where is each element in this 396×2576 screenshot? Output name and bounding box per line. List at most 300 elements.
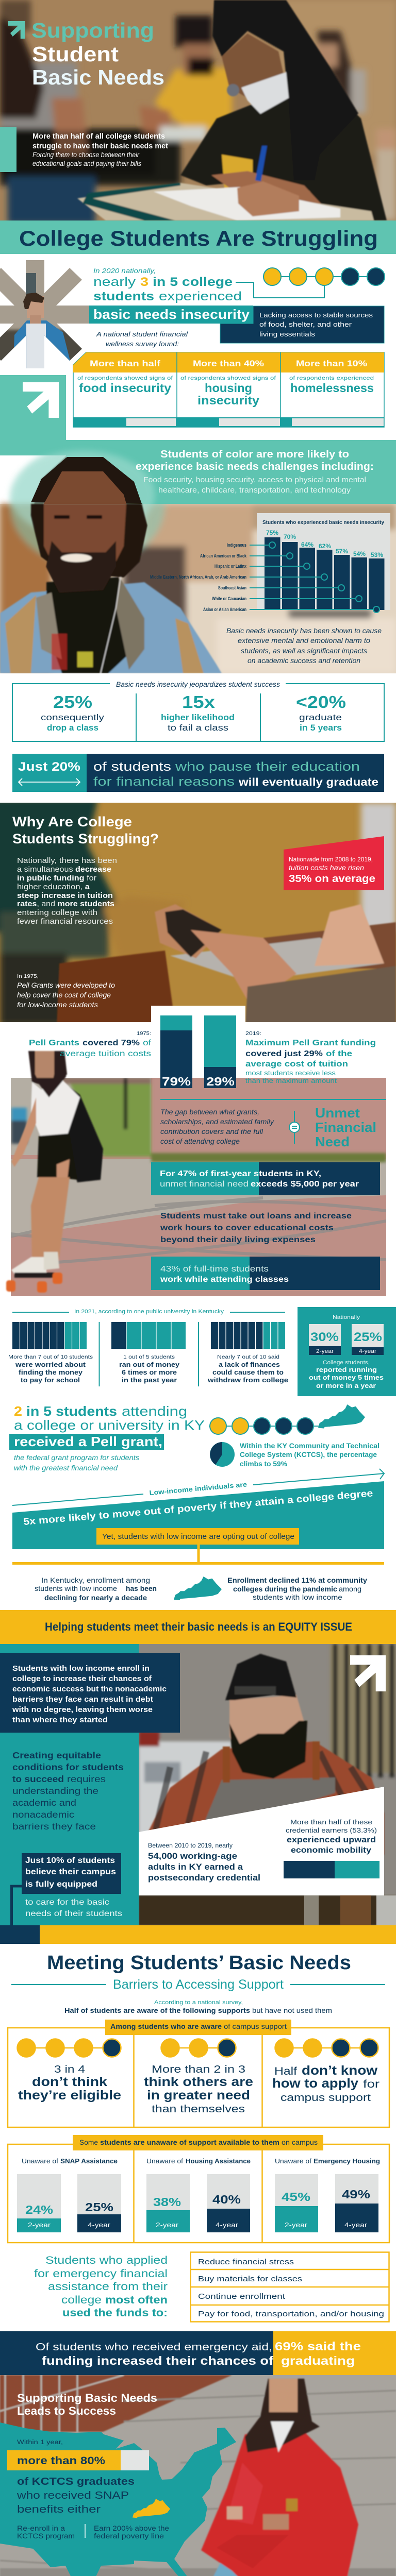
- bar chart: basic needs insecurity by race: 75%: [266, 529, 278, 536]
- panel: aware of campus support: Half: [274, 2065, 297, 2077]
- label: basic needs insecurity: basic needs insecurity: [93, 307, 250, 322]
- list: uses of funds: [190, 2252, 389, 2321]
- bar chart: basic needs insecurity by race: 64%: [301, 541, 314, 548]
- text: emergency financial assistance: [34, 2255, 168, 2319]
- headline: 2 in 5 students: 2: [14, 1403, 22, 1419]
- callout: low income debt: Students with low income enroll in: [12, 1665, 150, 1673]
- text: national funding paragraph: [17, 857, 117, 926]
- light teal frame with arrow: [0, 375, 66, 442]
- panel: university stats: More than 7 out of 10 students: [8, 1354, 93, 1360]
- text: creating equitable conditions: barriers they face: [12, 1821, 96, 1832]
- survey table: insecurity: [197, 394, 259, 407]
- panel: aware of campus support: than themselves: [152, 2104, 245, 2115]
- survey table: [73, 352, 384, 427]
- text: creating equitable conditions: academic and: [12, 1798, 76, 1808]
- callout: just 20%: Just 20%: [18, 760, 80, 774]
- heading: Meeting Students' Basic Needs: Meeting Students’ Basic Needs: [47, 1952, 351, 1974]
- callout: just 10%: Just 10% of students: [25, 1856, 115, 1865]
- headline: 2 in 5 students: a college or university in KY: [14, 1417, 205, 1433]
- text: enrollment decline: has been: [126, 1584, 157, 1592]
- text: Pell Grants 1975: [17, 973, 116, 1009]
- text: enrollment decline: declining for nearly a decade: [44, 1594, 147, 1602]
- teal band: students of color: Students of color are more likely to: [160, 449, 349, 460]
- panel: jeopardizes student success: <20%: [296, 692, 346, 711]
- bar chart: basic needs insecurity by race: 57%: [336, 548, 348, 555]
- panel: nationally: 4-year: [359, 1348, 376, 1354]
- panel: aware of campus support: More than 2 in 3: [152, 2064, 245, 2075]
- text: national survey: According to a national survey,: [154, 1999, 243, 2006]
- text: unmet need definition: The gap between what grants,: [160, 1108, 259, 1116]
- text: emergency financial assistance: used the funds to:: [62, 2307, 168, 2319]
- text: creating equitable conditions: nonacademic: [12, 1809, 74, 1820]
- text: mental and emotional harm: [226, 627, 382, 665]
- text: national funding paragraph: entering college with: [17, 909, 97, 917]
- white panel behind Pell bars: [0, 1006, 396, 1155]
- stat bar: 47% first-year: exceeds $5,000 per year: [251, 1180, 359, 1189]
- panel: KCTCS 80%: [7, 2439, 169, 2540]
- hero photo: student writing in class: [0, 0, 396, 224]
- panel: unaware of support: 49%: [342, 2188, 370, 2201]
- heading: unmet financial need: Financial: [315, 1120, 376, 1135]
- bar chart: basic needs insecurity by race: 62%: [319, 543, 331, 550]
- text: survey intro: wellness survey found:: [106, 340, 179, 348]
- panel: aware of campus support: how to apply: [272, 2076, 358, 2091]
- panel: upward mobility: More than half of these: [290, 1818, 372, 1826]
- teal accent block: [0, 127, 16, 172]
- text: KCTCS percentage: College System (KCTCS), the percentage: [240, 1451, 377, 1459]
- photo continuation: face: [31, 504, 147, 592]
- text: Pell Grants 1975: Pell Grants were developed to: [17, 981, 116, 989]
- icon: 3 of 5 circles with connector: [236, 268, 385, 298]
- panel: 5x more likely: [12, 1481, 384, 1549]
- text: 1975 Pell coverage: covered 79%: [82, 1039, 140, 1047]
- panel: unaware of support: Unaware of: [275, 2158, 312, 2165]
- bar chart: basic needs insecurity by race: Middle Eastern, North African, Arab, or Arab American: [150, 574, 246, 580]
- bar chart: basic needs insecurity by race: 70%: [284, 533, 296, 540]
- icon: 2 of 5 circles: [209, 1418, 330, 1434]
- text: emergency financial assistance: for emergency financial: [34, 2268, 168, 2280]
- headline: 3 in 5 college students: students: [93, 290, 154, 303]
- text: unmet need definition: [160, 1108, 274, 1145]
- heading: unmet financial need: Unmet: [315, 1105, 360, 1121]
- heading: unmet financial need: Need: [315, 1134, 350, 1149]
- hero subtitle: educational goals and paying their bills: [32, 160, 141, 167]
- title: Student: [32, 42, 119, 66]
- callout: just 10%: is fully equipped: [25, 1880, 97, 1889]
- panel: unaware of support: Emergency Housing: [314, 2158, 380, 2165]
- text: KCTCS percentage: [240, 1442, 380, 1468]
- panel: unaware of support: 40%: [212, 2193, 241, 2206]
- panel: unaware of support: Housing Assistance: [186, 2158, 251, 2165]
- bar chart: basic needs insecurity by race: Asian or Asian American: [203, 607, 246, 612]
- panel: jeopardizes student success: drop a class: [47, 723, 98, 733]
- panel: KCTCS 80%: of KCTCS graduates: [17, 2476, 135, 2487]
- panel: jeopardizes student success: 25%: [53, 692, 92, 711]
- text: loans and work hours: beyond their daily living expenses: [160, 1235, 316, 1244]
- panel: university stats: withdraw from college: [207, 1377, 288, 1384]
- panel: unaware of support: Unaware of: [146, 2158, 184, 2165]
- panel: unaware of support: Some: [79, 2139, 98, 2146]
- subheading: barriers: Barriers to Accessing Support: [113, 1977, 284, 1992]
- survey table: homelessness: [290, 381, 374, 395]
- heading: supporting basic needs leads to success: [17, 2392, 157, 2417]
- panel: nationally: 2-year: [316, 1348, 334, 1354]
- callout: just 20%: [12, 754, 384, 792]
- panel: KCTCS 80%: benefits either: [17, 2504, 101, 2515]
- callout: low income debt: college to increase their chances of: [12, 1675, 152, 1683]
- panel: unaware of support: 2-year: [156, 2221, 179, 2229]
- panel: university stats: finding the money: [19, 1369, 82, 1376]
- teal band: students of color: [0, 440, 396, 538]
- map: eastern US: [0, 2422, 236, 2576]
- headline: 2 in 5 students: attending: [122, 1403, 187, 1419]
- panel: unaware of support: 4-year: [344, 2221, 368, 2229]
- panel: aware of campus support: [8, 2020, 389, 2127]
- text: emergency financial assistance: most often: [105, 2294, 168, 2306]
- bar chart: basic needs insecurity by race: [150, 513, 390, 613]
- chart: Pell Grant coverage bars: 79%: [162, 1075, 191, 1088]
- panel: nationally: College students,: [323, 1360, 370, 1366]
- text: 1975 Pell coverage: Pell Grants: [29, 1039, 79, 1047]
- stat bar: 47% first-year: unmet financial need: [160, 1180, 249, 1189]
- photo: man in asterisk shape: [0, 260, 89, 368]
- panel: unaware of support: on campus: [282, 2139, 318, 2146]
- callout: tuition costs risen: 35% on average: [289, 873, 375, 885]
- panel: aware of campus support: they’re eligible: [18, 2088, 121, 2103]
- text: unmet need definition: cost of attending college: [160, 1138, 240, 1145]
- panel: university stats: 6 times or more: [122, 1369, 177, 1376]
- panel: unaware of support: Unaware of: [22, 2158, 59, 2165]
- title: [31, 19, 164, 89]
- definition box: lacking access: Lacking access to stable sources: [259, 311, 373, 319]
- panel: jeopardizes student success: consequently: [41, 713, 105, 722]
- text: unmet need definition: contribution covers and the full: [160, 1128, 263, 1136]
- headline: 2 in 5 students: received a Pell grant,: [14, 1434, 162, 1449]
- list: uses of funds: Continue enrollment: [198, 2292, 286, 2301]
- banner: College Students Are Struggling: College Students Are Struggling: [19, 226, 378, 250]
- text: community colleges decline: Enrollment declined 11% at community: [227, 1576, 367, 1584]
- text: national funding paragraph: Nationally, there has been: [17, 857, 117, 865]
- text: national funding paragraph: higher education, a: [17, 883, 90, 891]
- text: loans and work hours: Students must take out loans and increase: [160, 1212, 352, 1221]
- arrow: low-income rising: Low-income individuals are: [149, 1480, 248, 1497]
- list: uses of funds: Reduce financial stress: [198, 2258, 294, 2266]
- text: creating equitable conditions: Creating equitable: [12, 1750, 101, 1760]
- text: Pell Grants 1975: In 1975,: [17, 973, 39, 979]
- definition box: lacking access: of food, shelter, and other: [259, 320, 352, 328]
- panel: unaware of support: 38%: [153, 2195, 181, 2209]
- text: Pell Grants 1975: help cover the cost of college: [17, 991, 111, 999]
- text: 2019 Pell coverage: average cost of tuition: [245, 1060, 348, 1069]
- heading: unmet financial need: [315, 1105, 376, 1149]
- band: 69% emergency aid: funding increased their chances of: [42, 2354, 273, 2367]
- panel: KCTCS 80%: Within 1 year,: [17, 2439, 63, 2446]
- title: Supporting: [31, 19, 154, 42]
- panel: upward mobility: credential earners (53.3%): [286, 1826, 377, 1834]
- stat bar: 43% work: 43% of full-time students: [160, 1265, 269, 1274]
- callout: just 10%: believe their campus: [25, 1868, 116, 1876]
- definition box: lacking access: living essentials: [259, 330, 316, 338]
- photo: student on skateboard: [6, 1051, 386, 1296]
- panel: KCTCS 80%: who received SNAP: [16, 2490, 129, 2501]
- panel: unaware of support: 4-year: [88, 2221, 111, 2229]
- text: 2019 Pell coverage: of the: [326, 1049, 352, 1058]
- text: mental and emotional harm: extensive mental and emotional harm to: [238, 637, 371, 645]
- panel: upward mobility: Between 2010 to 2019, nearly: [148, 1843, 233, 1849]
- text: mental and emotional harm: Basic needs insecurity has been shown to cause: [226, 627, 382, 635]
- teal band: students of color: Food security, housing security, access to physical and mental: [143, 476, 366, 484]
- headline: 2 in 5 students: with the greatest financial need: [14, 1464, 118, 1472]
- panel: unaware of support: 45%: [282, 2190, 310, 2204]
- panel: 5x more likely: 5x more likely to move out of poverty if they attain a college degree: [23, 1488, 373, 1528]
- survey table: of respondents showed signs of: [180, 375, 276, 381]
- icon: Kentucky in gold: [133, 2499, 170, 2518]
- headline: 3 in 5 college students: nearly: [93, 275, 136, 289]
- panel: university stats: in the past year: [122, 1377, 177, 1384]
- panel: aware of campus support: in greater need: [147, 2088, 250, 2103]
- panel: 5x more likely: Yet, students with low income are opting out of college: [102, 1533, 294, 1541]
- photo: student at laptop: [0, 799, 396, 1025]
- arrow: low-income rising: [12, 1469, 384, 1505]
- panel: university stats: a lack of finances: [219, 1361, 280, 1368]
- panel: jeopardizes student success: higher likelihood: [161, 713, 235, 722]
- panel: unaware of support: students are unaware of support available to them: [100, 2139, 279, 2146]
- stat bar: 47% first-year: [151, 1162, 380, 1195]
- photo: graduate on steps: [0, 2375, 396, 2576]
- text: creating equitable conditions: understanding the: [12, 1786, 98, 1796]
- text: 2019 Pell coverage: covered just 29%: [245, 1049, 323, 1058]
- banner: College Students Are Struggling: [0, 221, 396, 254]
- band: 69% emergency aid: [0, 2331, 396, 2375]
- panel: university stats: were worried about: [15, 1361, 86, 1368]
- headline: 3 in 5 college students: 3: [140, 275, 148, 289]
- stat bar: 43% work: work while attending classes: [160, 1275, 289, 1284]
- text: creating equitable conditions: [12, 1750, 124, 1832]
- band: 69% emergency aid: Of students who received emergency aid,: [36, 2342, 272, 2353]
- panel: unaware of support: 4-year: [216, 2221, 239, 2229]
- text: national funding paragraph: in public funding for: [17, 874, 96, 883]
- survey table: More than 40%: [193, 359, 264, 368]
- panel: aware of campus support: for: [363, 2078, 380, 2090]
- headline: 3 in 5 college students: in 5 college: [153, 275, 233, 289]
- callout: low income debt: barriers they face can result in debt: [12, 1696, 153, 1704]
- callout: tuition costs risen: [284, 836, 384, 890]
- bar chart: basic needs insecurity by race: Students who experienced basic needs insecurity: [262, 519, 384, 526]
- survey table: More than 10%: [296, 359, 367, 368]
- panel: unaware of support: 25%: [85, 2200, 113, 2214]
- panel: KCTCS 80%: Re-enroll in a: [17, 2524, 65, 2532]
- survey table: of respondents showed signs of: [77, 375, 173, 381]
- text: enrollment decline: students with low income: [35, 1584, 117, 1592]
- heading: supporting basic needs leads to success: Leads to Success: [17, 2404, 116, 2417]
- heading: why are college students struggling: Students Struggling?: [12, 831, 159, 846]
- bar chart: basic needs insecurity by race: African American or Black: [200, 553, 247, 558]
- band: 69% emergency aid: 69% said the: [275, 2340, 361, 2353]
- icon: equals: [289, 1111, 300, 1144]
- text: loans and work hours: work hours to cover educational costs: [160, 1224, 334, 1232]
- panel: nationally: 25%: [354, 1330, 382, 1344]
- text: loans and work hours: [160, 1212, 352, 1244]
- bar chart: basic needs insecurity by race: Indigenous: [227, 543, 246, 548]
- text: emergency financial assistance: Students who applied: [45, 2255, 168, 2266]
- panel: upward mobility: postsecondary credential: [148, 1873, 260, 1883]
- survey table: food insecurity: [79, 381, 171, 395]
- panel: university stats: ran out of money: [119, 1361, 179, 1368]
- stat bar: 47% first-year: For 47% of first-year students in KY,: [160, 1170, 321, 1178]
- banner: equity issue: [0, 1610, 396, 1644]
- panel: jeopardizes student success: graduate: [299, 713, 342, 722]
- hero subtitle: More than half of all college students: [32, 132, 165, 141]
- text: community colleges decline: [227, 1576, 367, 1601]
- panel: nationally: or more in a year: [316, 1382, 376, 1389]
- panel: aware of campus support: of campus support: [224, 2023, 287, 2030]
- icon: Kentucky map: [174, 1577, 222, 1600]
- definition box: lacking access: [220, 306, 384, 343]
- panel: aware of campus support: don’t know: [302, 2063, 378, 2078]
- panel: nationally: [298, 1307, 396, 1396]
- headline: 2 in 5 students: [9, 1403, 205, 1472]
- bar chart: basic needs insecurity by race: White or Caucasian: [212, 596, 246, 601]
- panel: unaware of support: SNAP Assistance: [60, 2158, 118, 2165]
- panel: unaware of support: 2-year: [28, 2221, 51, 2229]
- heading: why are college students struggling: Why Are College: [12, 814, 132, 829]
- headline: 2 in 5 students: in 5 students: [26, 1403, 117, 1419]
- text: unmet need definition: scholarships, and estimated family: [160, 1118, 274, 1126]
- panel: upward mobility: adults in KY earned a: [148, 1862, 243, 1872]
- panel: university stats: [8, 1322, 288, 1386]
- callout: just 20%: who pause their education: [175, 760, 360, 774]
- callout: just 20%: of students: [93, 760, 171, 774]
- text: 1975 Pell coverage: average tuition costs: [60, 1049, 151, 1058]
- text: enrollment decline: [35, 1576, 157, 1602]
- text: national survey: Half of students are aware of the following supports: [64, 2007, 250, 2014]
- banner: equity issue: Helping students meet their basic needs is an EQUITY ISSUE: [45, 1620, 352, 1633]
- panel: nationally: 30%: [310, 1330, 339, 1344]
- callout: just 10%: needs of their students: [25, 1909, 122, 1918]
- stat bar: 43% work: [151, 1257, 380, 1290]
- panel: KCTCS 80%: federal poverty line: [94, 2532, 164, 2540]
- panel: jeopardizes student success: 15x: [182, 692, 216, 711]
- icon: arrow: [8, 21, 25, 39]
- panel: nationally: Nationally: [333, 1314, 360, 1320]
- text: national funding paragraph: rates , and more students: [17, 900, 114, 908]
- text: creating equitable conditions: to succeed: [12, 1774, 64, 1784]
- text: creating equitable conditions: requires: [67, 1774, 106, 1784]
- panel: KCTCS 80%: Earn 200% above the: [94, 2524, 169, 2532]
- bar chart: basic needs insecurity by race: Hispanic or Latinx: [214, 564, 246, 569]
- callout: low income debt: economic success but the nonacademic: [12, 1685, 167, 1693]
- chart: Pell Grant coverage bars: 29%: [206, 1075, 235, 1088]
- callout: just 10%: to care for the basic: [25, 1898, 109, 1907]
- heading: why are college students struggling: [12, 814, 159, 846]
- survey table: of respondents experienced: [289, 375, 374, 381]
- text: KCTCS percentage: climbs to 59%: [240, 1460, 287, 1468]
- survey table: More than half: [90, 359, 161, 368]
- headline: 2 in 5 students: the federal grant program for students: [14, 1454, 139, 1462]
- panel: nationally: reported running: [316, 1366, 377, 1374]
- bar chart: basic needs insecurity by race: 53%: [371, 551, 383, 558]
- text: emergency financial assistance: assistance from their: [48, 2281, 168, 2293]
- text: 2019 Pell coverage: Maximum Pell Grant funding: [245, 1039, 376, 1047]
- text: survey intro: A national student financial: [96, 330, 188, 338]
- text: community colleges decline: students with low income: [253, 1593, 342, 1601]
- panel: unaware of support: 2-year: [285, 2221, 308, 2229]
- panel: aware of campus support: don’t think: [32, 2075, 107, 2089]
- panel: aware of campus support: campus support: [280, 2092, 371, 2104]
- survey table: housing: [205, 381, 252, 395]
- headline: 3 in 5 college students: In 2020 nationally,: [93, 267, 156, 275]
- panel: upward mobility: [139, 1787, 384, 1895]
- text: 1975 Pell coverage: [29, 1030, 152, 1058]
- text: 2019 Pell coverage: than the maximum amount: [245, 1077, 337, 1084]
- text: national survey: but have not used them: [252, 2007, 332, 2014]
- panel: university stats: could cause them to: [212, 1369, 284, 1376]
- callout: just 10%: [22, 1853, 122, 1918]
- panel: aware of campus support: Among students who are aware: [110, 2023, 222, 2030]
- panel: KCTCS 80%: more than 80%: [17, 2455, 105, 2467]
- teal panel: equity: [0, 1644, 139, 1925]
- title: Basic Needs: [32, 65, 164, 89]
- text: Pell Grants 1975: for low-income students: [17, 1001, 98, 1009]
- headline: 3 in 5 college students: [93, 267, 242, 303]
- panel: upward mobility: experienced upward: [287, 1836, 376, 1844]
- callout: low income debt: with no degree, leaving them worse: [12, 1706, 153, 1714]
- text: mental and emotional harm: students, as well as significant impacts: [241, 647, 367, 655]
- text: 1975 Pell coverage: 1975:: [137, 1030, 151, 1037]
- heading: supporting basic needs leads to success: Supporting Basic Needs: [17, 2392, 157, 2404]
- text: national funding paragraph: a simultaneous decrease: [17, 866, 111, 874]
- panel: university stats: 1 out of 5 students: [123, 1354, 175, 1360]
- hero subtitle: [32, 132, 168, 167]
- panel: nationally: out of money 5 times: [309, 1374, 384, 1381]
- panel: university stats: to pay for school: [21, 1377, 80, 1384]
- panel: jeopardizes student success: in 5 years: [300, 723, 342, 733]
- hero subtitle: struggle to have their basic needs met: [32, 142, 168, 150]
- callout: tuition costs risen: tuition costs have risen: [289, 864, 364, 872]
- text: 2019 Pell coverage: most students receive less: [245, 1070, 336, 1077]
- panel: upward mobility: 54,000 working-age: [148, 1852, 237, 1861]
- panel: unaware of support: [8, 2135, 389, 2243]
- text: creating equitable conditions: conditions for students: [12, 1762, 124, 1772]
- text: 1975 Pell coverage: of: [143, 1039, 152, 1047]
- bar chart: basic needs insecurity by race: Southeast Asian: [218, 585, 246, 590]
- photo: man in apron: [139, 1644, 396, 1925]
- hero subtitle: Forcing them to choose between their: [32, 151, 139, 159]
- band: 69% emergency aid: graduating: [281, 2354, 355, 2367]
- panel: aware of campus support: 3 in 4: [54, 2064, 85, 2075]
- text: community colleges decline: colleges during the pandemic: [233, 1585, 337, 1593]
- teal band: students of color: experience basic needs challenges including:: [136, 461, 374, 472]
- text: emergency financial assistance: college: [61, 2294, 102, 2306]
- callout: low income debt: than where they started: [12, 1716, 108, 1724]
- list: uses of funds: Buy materials for classes: [198, 2275, 302, 2283]
- panel: jeopardizes student success: [12, 681, 384, 741]
- text: survey intro: [96, 330, 188, 348]
- callout: low income debt: [0, 1653, 180, 1733]
- photo: smiling man with earphones: [0, 443, 396, 673]
- text: KCTCS percentage: Within the KY Community and Technical: [240, 1442, 380, 1450]
- text: national funding paragraph: steep increase in tuition: [17, 892, 113, 900]
- panel: aware of campus support: think others are: [144, 2075, 253, 2089]
- text: national survey: [64, 1999, 332, 2014]
- text: 2019 Pell coverage: 2019:: [245, 1030, 261, 1037]
- text: mental and emotional harm: on academic success and retention: [248, 657, 360, 665]
- panel: jeopardizes student success: to fail a class: [168, 723, 228, 733]
- panel: jeopardizes student success: Basic needs insecurity jeopardizes student success: [116, 681, 280, 688]
- gold band: [0, 1925, 396, 1944]
- list: uses of funds: Pay for food, transportation, and/or housing: [198, 2310, 384, 2318]
- panel: upward mobility: economic mobility: [291, 1846, 371, 1855]
